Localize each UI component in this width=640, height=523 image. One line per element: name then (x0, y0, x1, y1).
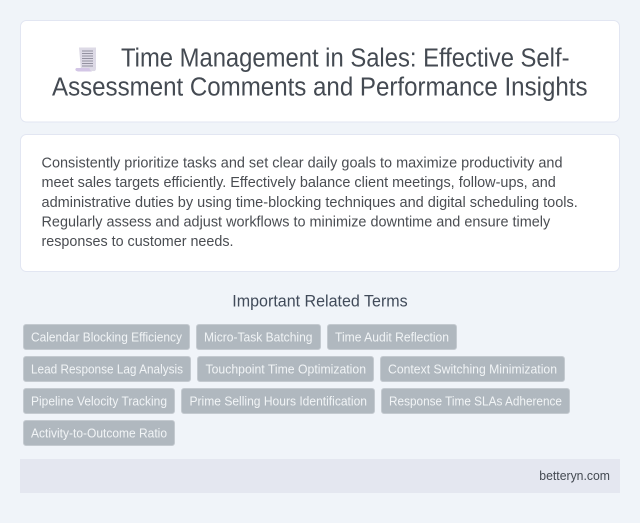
tag: prime selling (182, 388, 374, 414)
summary text: meet sales targets efficiently. Effectively balance client meetings, follow-ups, and (42, 174, 556, 191)
tag: time audit (328, 324, 456, 350)
tag: calendar blocking (24, 324, 190, 350)
summary text: responses to customer needs. (42, 233, 234, 250)
icon: paper scroll (75, 48, 96, 72)
tag: micro-task (196, 324, 320, 350)
tag: time audit: Time Audit Reflection (335, 330, 449, 344)
summary text: Consistently prioritize tasks and set clear daily goals to maximize productivity and (42, 155, 562, 172)
tag: response time: Response Time SLAs Adherence (389, 394, 562, 408)
tag: touchpoint (198, 356, 374, 382)
tag: calendar blocking: Calendar Blocking Efficiency (31, 330, 183, 344)
summary text: Regularly assess and adjust workflows to minimize downtime and ensure timely (42, 214, 551, 230)
tag: touchpoint: Touchpoint Time Optimization (206, 362, 366, 376)
heading: important related terms: Important Related Terms (232, 293, 408, 311)
tag: pipeline velocity: Pipeline Velocity Tracking (31, 394, 167, 408)
title (52, 45, 588, 102)
tag: prime selling: Prime Selling Hours Identification (190, 394, 367, 408)
title: Time Management in Sales: Effective Self- (121, 45, 570, 73)
title: Assessment Comments and Performance Insights (52, 74, 588, 102)
tag: activity-to-outcome: Activity-to-Outcome Ratio (31, 426, 167, 440)
tag: activity-to-outcome (24, 420, 174, 446)
panel: summary card (20, 134, 620, 272)
footer (20, 459, 620, 493)
tag: micro-task: Micro-Task Batching (204, 330, 312, 344)
summary text: administrative duties by using time-blocking techniques and digital scheduling tools. (42, 194, 578, 211)
tag: response time (382, 388, 570, 414)
panel: title card (20, 20, 620, 122)
footer: site name: betteryn.com (539, 469, 610, 483)
tag: context switching: Context Switching Minimization (388, 362, 557, 376)
tag: pipeline velocity (24, 388, 174, 414)
tags: related terms (24, 324, 570, 446)
tag: context switching (380, 356, 564, 382)
tag: lead response (24, 356, 190, 382)
summary text (42, 155, 578, 250)
tag: lead response: Lead Response Lag Analysis (31, 362, 183, 376)
